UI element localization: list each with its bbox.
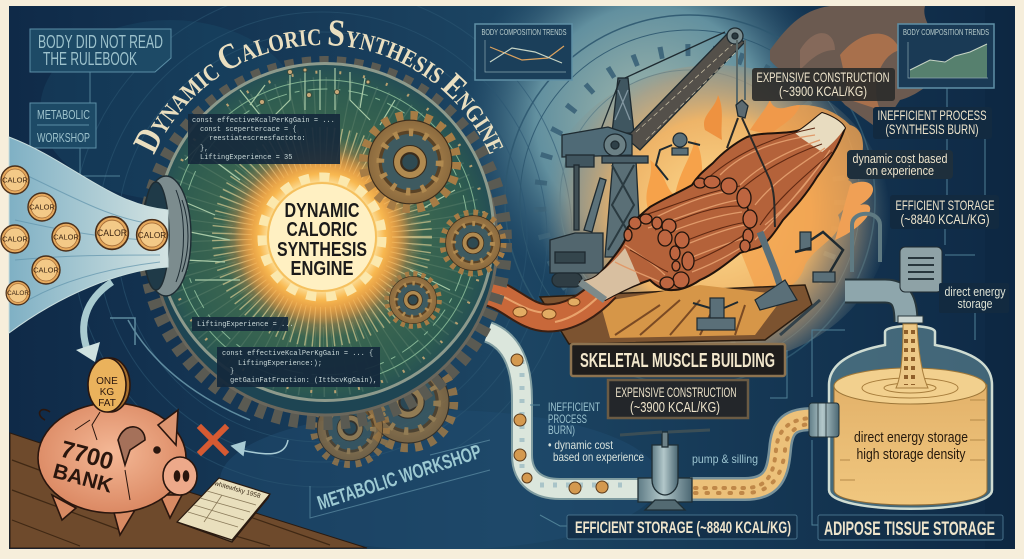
label: metabolic workshop, floor [310, 440, 490, 518]
assembly robots [656, 133, 843, 330]
gear: right [443, 213, 503, 273]
valve [620, 430, 710, 510]
arrow: toward x mark [232, 440, 288, 455]
coin: one kg fat: KG [100, 387, 114, 398]
code block: bottom: const effectiveKcalPerKgGain = ... { [222, 350, 373, 358]
tank label: high storage density [856, 446, 966, 463]
right side connector lines [80, 72, 985, 526]
circuit board [155, 62, 495, 402]
bank label: BANK [50, 460, 115, 498]
rulebook [177, 478, 270, 542]
code block: lifting experience: LiftingExperience = ... [197, 321, 294, 329]
note: inefficient process burn: INEFFICIENT [548, 400, 600, 414]
note: inefficient process burn [548, 400, 644, 464]
code block: bottom: getGainFatFraction: (IttbcvKgGain), [230, 377, 377, 385]
tank outflow pipe [845, 291, 923, 323]
engine intake ring body [141, 176, 191, 296]
blueprint curves near the bank [110, 318, 250, 420]
sign: expensive construction, lower: (~3900 KCAL/KG) [630, 399, 720, 416]
chart: body composition trends, right: BODY COMPOSITION TRENDS [903, 28, 989, 37]
callout: body did not read the rulebook [30, 29, 171, 72]
label: efficient storage, top [890, 195, 999, 229]
sign: expensive construction, lower: EXPENSIVE CONSTRUCTION [616, 384, 736, 400]
arrow: stream down to bank [76, 282, 112, 362]
bank label [50, 436, 116, 498]
engine label [277, 200, 367, 280]
label: expensive construction, top [752, 68, 895, 101]
coin: one kg fat [88, 358, 130, 412]
engine label: ENGINE [290, 258, 354, 280]
sign: expensive construction, lower [608, 380, 748, 418]
sign: skeletal muscle building [571, 344, 785, 376]
engine label: CALORIC [286, 219, 358, 241]
label: metabolic workshop, floor: METABOLIC WORKSHOP [315, 441, 484, 515]
callout: metabolic workshop: METABOLIC [37, 107, 90, 122]
outer gear teeth [147, 65, 503, 421]
engine gear disc [147, 62, 503, 421]
pale process pipe [488, 332, 645, 494]
callout: metabolic workshop: WORKSHOP [37, 130, 90, 145]
piggy bank [38, 358, 197, 535]
calorie stream funnel [1, 137, 168, 333]
platform under the muscle [540, 285, 820, 372]
code block: top: LiftingExperience = 35 [200, 154, 292, 162]
label: efficient storage, top: (~8840 KCAL/KG) [900, 211, 990, 227]
muscle bundle ends [624, 176, 757, 289]
smoke cloud [770, 6, 937, 130]
code block: bottom [217, 347, 380, 387]
sign: skeletal muscle building: SKELETAL MUSCLE BUILDING [580, 350, 775, 372]
tank label [854, 429, 968, 463]
rulebook: whitewfsky 1958 [212, 480, 262, 500]
wooden table [10, 433, 367, 548]
chart: body composition trends, right [898, 24, 994, 88]
label: direct energy storage, right: direct energy [944, 284, 1006, 299]
label: inefficient process: (SYNTHESIS BURN) [886, 121, 978, 137]
gear: workshop large [363, 357, 453, 447]
code block: top: }, [200, 145, 208, 153]
label: direct energy storage, right: storage [958, 296, 992, 311]
fire glow and flames [540, 65, 890, 365]
note: inefficient process burn: BURN) [548, 423, 575, 437]
engine label: DYNAMIC [284, 200, 360, 222]
label: dynamic cost: dynamic cost based [852, 151, 948, 166]
label: expensive construction, top: (~3900 KCAL/KG) [779, 83, 867, 99]
callout: metabolic workshop [30, 103, 96, 148]
engine label: SYNTHESIS [277, 239, 367, 261]
code block: top [188, 114, 340, 164]
note: inefficient process burn: • dynamic cost [548, 438, 614, 452]
code block: top: const effectiveKcalPerKgGain = ... [192, 117, 335, 125]
crane [550, 28, 748, 287]
orange fat pipe to the tank [690, 418, 815, 493]
code block: top: reestiatescreesfactoto: [209, 135, 306, 143]
label: inefficient process [873, 107, 992, 139]
gear: large upper right [364, 116, 456, 208]
note: inefficient process burn: based on experience [553, 450, 644, 464]
code block: bottom: } [230, 368, 234, 376]
central sun gear [234, 149, 410, 325]
title arc: DYNAMIC CALORIC SYNTHESIS ENGINE [133, 20, 504, 155]
chart: body composition trends, left [475, 24, 572, 80]
callout: body did not read the rulebook: THE RULEBOOK [43, 49, 137, 69]
code block: bottom: LiftingExperience:); [238, 360, 322, 368]
tank inflow connector [809, 403, 839, 437]
muscle supply tube [488, 288, 606, 322]
adipose storage tank [809, 291, 992, 509]
label: expensive construction, top: EXPENSIVE CONSTRUCTION [756, 69, 890, 85]
note: inefficient process burn: PROCESS [548, 412, 587, 426]
storage device [852, 214, 942, 292]
red x mark [201, 428, 225, 452]
engine intake ring ridges [176, 190, 188, 282]
label: efficient storage, bottom [567, 515, 797, 539]
coin: one kg fat: ONE [96, 376, 118, 387]
chart: body composition trends, left: BODY COMPOSITION TRENDS [482, 28, 566, 37]
label: dynamic cost [847, 150, 953, 179]
coin: one kg fat: FAT [98, 398, 116, 409]
gear: lower right [387, 274, 439, 326]
calorie coins [1, 166, 167, 305]
gear: workshop small [314, 392, 386, 464]
skeletal muscle [580, 113, 845, 300]
label: dynamic cost: on experience [866, 163, 934, 178]
code block: top: const sceperterсace = { [200, 126, 297, 134]
background blueprint arches [505, 15, 875, 385]
bank label: 7700 [58, 436, 116, 476]
tank label: direct energy storage [854, 429, 968, 446]
note: pump and silling: pump & silling [692, 452, 758, 466]
callout: body did not read the rulebook: BODY DID NOT READ [38, 32, 163, 52]
label: efficient storage, bottom: EFFICIENT STORAGE (~8840 KCAL/KG) [575, 518, 791, 537]
code block: lifting experience [192, 317, 294, 331]
label: direct energy storage, right [939, 283, 1009, 313]
